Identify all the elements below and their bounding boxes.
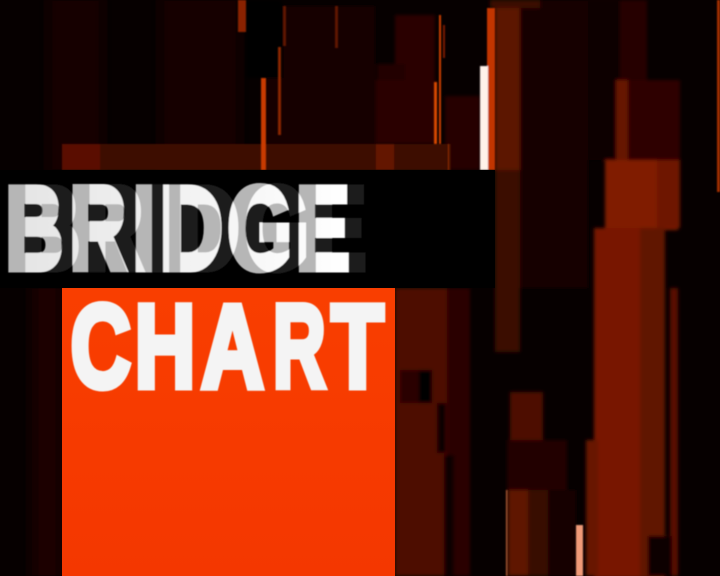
title overlap highlight white: I (133, 163, 155, 295)
black title band (0, 170, 495, 288)
title main layer gray: E (296, 163, 349, 295)
title overlap highlight white (24, 184, 350, 273)
title ghost layer dark: I (150, 163, 172, 295)
title: BRIDGE (8, 182, 366, 274)
title main layer gray: G (228, 163, 292, 295)
orange panel (62, 288, 395, 576)
background vertical columns (246, 0, 680, 576)
title ghost layer dark: G (245, 163, 309, 295)
title ghost layer dark: E (313, 163, 366, 295)
title overlap highlight white: G (228, 163, 292, 295)
title overlap highlight white: D (160, 163, 222, 295)
glowing vertical light streaks (238, 0, 720, 576)
title: CHART (71, 281, 384, 413)
title main layer gray: R (70, 163, 126, 295)
title ghost layer dark (22, 163, 366, 295)
title overlap highlight white: B (5, 163, 63, 295)
title: CHART: A (201, 281, 264, 413)
title ghost layer dark: D (177, 163, 240, 295)
title main layer gray: I (133, 163, 155, 295)
title: CHART: C (71, 281, 131, 413)
title: CHART: R (273, 281, 326, 413)
top band behind title (62, 144, 451, 170)
title ghost layer dark: R (87, 163, 143, 295)
title main layer gray: B (5, 163, 63, 295)
title overlap highlight white: E (296, 163, 349, 295)
title overlap highlight white: R (70, 163, 126, 295)
title main layer gray: D (160, 163, 222, 295)
title main layer gray (5, 163, 349, 295)
title: CHART: H (135, 281, 195, 413)
title: CHART: T (331, 281, 384, 413)
title ghost layer dark: B (22, 163, 80, 295)
soft dark red columns on the left (32, 0, 240, 576)
